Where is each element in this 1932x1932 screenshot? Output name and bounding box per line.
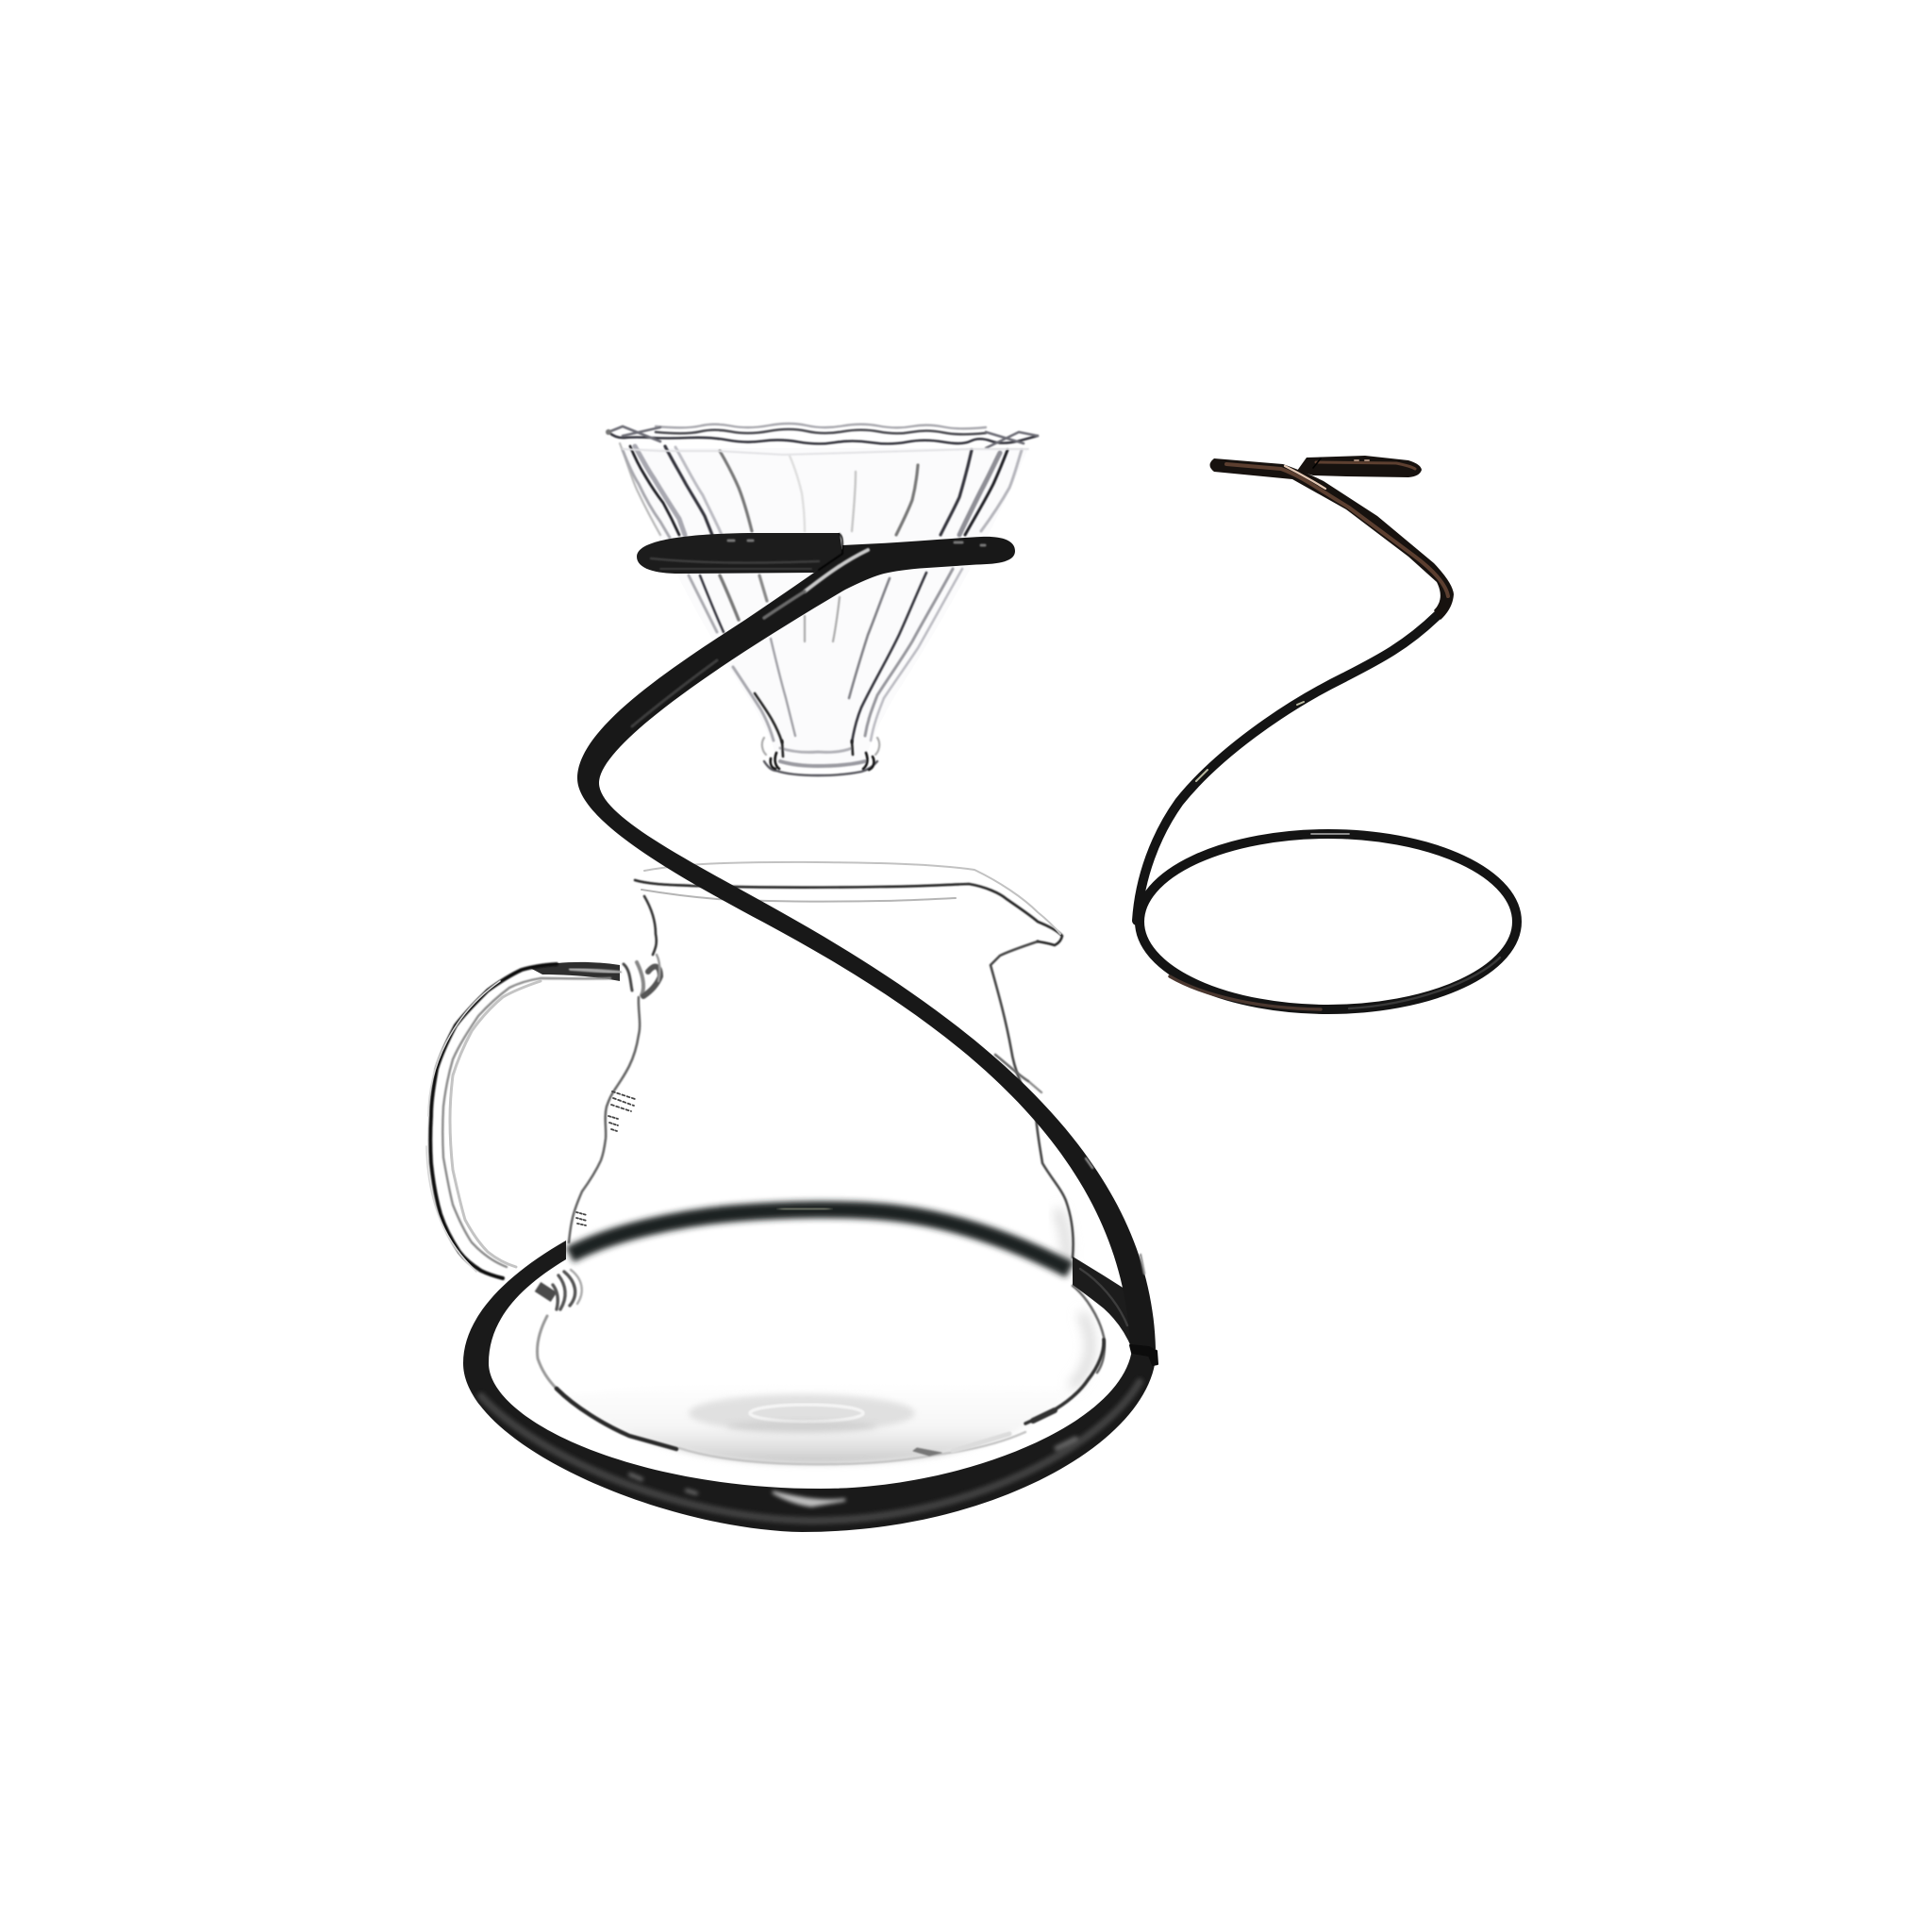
joint collar	[1130, 1345, 1158, 1365]
dripper body wash	[623, 448, 1028, 764]
small stand base ring	[1140, 834, 1517, 1009]
lower handle joint	[538, 1270, 582, 1309]
spiral stand with dripper and server	[463, 533, 1158, 1532]
dripper upper ribs	[620, 443, 1022, 538]
graduation marks	[576, 1091, 635, 1225]
server handle	[426, 962, 620, 1278]
dripper wavy rim	[606, 424, 1038, 455]
stand highlights	[632, 534, 1144, 1274]
small stand arm upper and left holder	[1209, 458, 1454, 620]
small stand arm highlights	[1196, 702, 1304, 781]
glass dripper	[606, 424, 1038, 775]
server body outline	[537, 896, 1105, 1464]
small stand bronze sheen	[1226, 458, 1448, 596]
glass coffee server	[426, 862, 1105, 1464]
small stand base ring bronze sheen	[1170, 976, 1321, 1009]
base ring sheen	[481, 1382, 1140, 1521]
base ring back section, blurred through glass	[570, 1209, 1070, 1270]
handle upper joint	[624, 955, 660, 996]
separate spiral stand	[1137, 456, 1517, 1009]
base ring right rear section	[1073, 1257, 1132, 1349]
small stand spiral arm lower	[1137, 615, 1438, 921]
base dark edges	[557, 1340, 1104, 1456]
dripper holder ring left side	[637, 533, 842, 574]
inner wall glow	[1058, 1212, 1091, 1385]
server base shading	[566, 1382, 1080, 1464]
base ring	[463, 1241, 1156, 1532]
small stand holder ring	[1297, 456, 1422, 477]
dripper lower ribs	[689, 569, 962, 742]
server rim and spout	[635, 862, 1062, 945]
spiral arm and holder right side	[577, 537, 1156, 1349]
dripper outlet collar	[762, 738, 879, 775]
base dimple	[689, 1394, 915, 1432]
